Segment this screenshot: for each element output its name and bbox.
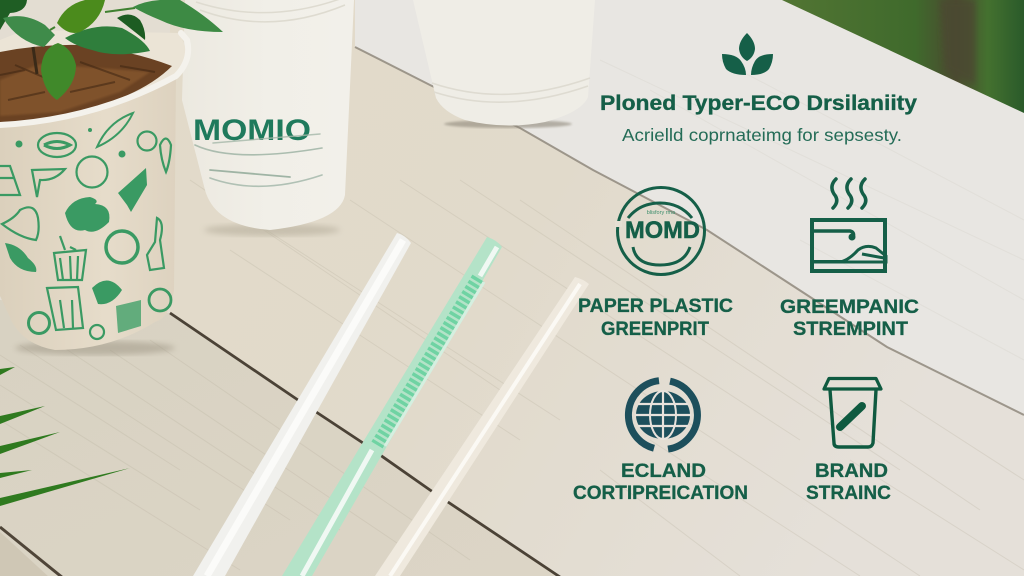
green striped straw bbox=[282, 237, 502, 576]
label: brand strainc: STRAINC bbox=[806, 482, 891, 504]
grass blades bottom left bbox=[0, 367, 130, 506]
label: ecland cortipreication bbox=[573, 460, 748, 504]
label: greempanic strempint: STREMPINT bbox=[793, 318, 908, 340]
label: greempanic strempint bbox=[780, 296, 919, 340]
icon: MOMD round badge bbox=[615, 188, 704, 274]
label: brand strainc: BRAND bbox=[815, 460, 888, 482]
label: paper plastic greenprit: GREENPRIT bbox=[601, 318, 709, 340]
subtitle: Acrielld coprnateimg for sepsesty. bbox=[622, 125, 902, 145]
icon: cup with straw bbox=[824, 378, 881, 447]
label: ecland cortipreication: CORTIPREICATION bbox=[573, 482, 748, 504]
icon: three leaves logo bbox=[722, 33, 773, 75]
back paper cup with MOMIO branding bbox=[182, 0, 354, 236]
icon: MOMD round badge: blisfory rma bbox=[647, 210, 676, 216]
label: paper plastic greenprit: PAPER PLASTIC bbox=[578, 295, 733, 317]
white paper straw right bbox=[375, 277, 589, 576]
cup logo text: MOMIO bbox=[193, 114, 311, 147]
cup rim bbox=[0, 33, 188, 125]
right paper cup bbox=[413, 0, 595, 128]
white paper straw left bbox=[193, 233, 411, 576]
soil bbox=[0, 45, 172, 122]
plant leaves bbox=[0, 0, 223, 100]
icon: steam over food tray bbox=[811, 179, 886, 271]
label: brand strainc bbox=[806, 460, 891, 504]
cup body bbox=[0, 76, 176, 350]
icon: MOMD round badge: MOMD bbox=[625, 217, 700, 244]
plant in patterned paper cup bbox=[0, 0, 223, 355]
label: ecland cortipreication: ECLAND bbox=[621, 460, 706, 482]
inner cup wall bbox=[0, 30, 188, 128]
label: greempanic strempint: GREEMPANIC bbox=[780, 296, 919, 318]
icon: globe ring bbox=[628, 381, 697, 449]
pattern doodles bbox=[0, 113, 171, 339]
title: Ploned Typer-ECO Drsilaniity bbox=[600, 92, 917, 115]
label: paper plastic greenprit bbox=[578, 295, 733, 340]
